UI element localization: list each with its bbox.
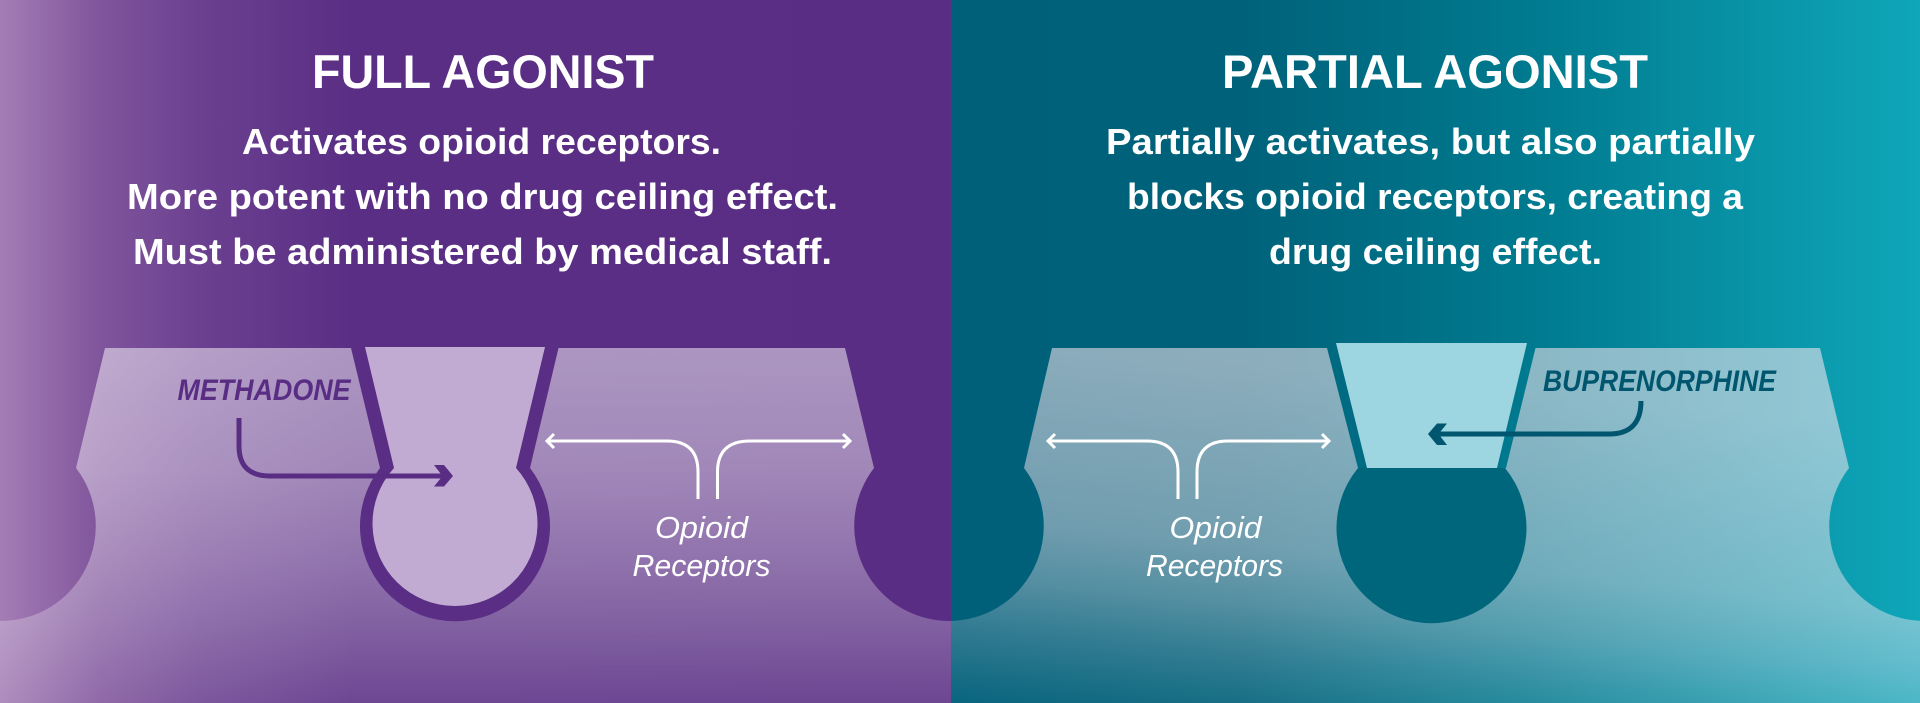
- description: partial agonist: [1106, 121, 1756, 272]
- description: full agonist: Must be administered by medical staff.: [133, 231, 832, 272]
- buprenorphine molecule partly seated in receptor: [1336, 343, 1527, 468]
- panel background: teal: [951, 0, 1920, 703]
- label: opioid receptors: Receptors: [1146, 548, 1283, 583]
- receptor cell surface: full agonist: [0, 348, 952, 703]
- arrow: methadone into receptor: [239, 418, 453, 486]
- label: opioid receptors: [632, 510, 770, 583]
- label: opioid receptors: Receptors: [632, 548, 770, 583]
- description: full agonist: Activates opioid receptors.: [242, 121, 721, 162]
- arrows: opioid receptors: [547, 434, 850, 499]
- label: opioid receptors: [1146, 510, 1283, 583]
- description: partial agonist: blocks opioid receptors, creating a: [1127, 176, 1744, 217]
- description: full agonist: [127, 121, 838, 272]
- description: partial agonist: Partially activates, but also partially: [1106, 121, 1756, 162]
- label: buprenorphine: BUPRENORPHINE: [1543, 365, 1777, 398]
- receptor cell surface: partial agonist: [948, 348, 1920, 703]
- label: opioid receptors: Opioid: [1170, 510, 1263, 545]
- label: methadone: METHADONE: [178, 374, 351, 407]
- arrows: opioid receptors: [1048, 434, 1329, 499]
- panel: full agonist: [0, 0, 952, 703]
- panel background: purple: [0, 0, 952, 703]
- heading: full agonist: FULL AGONIST: [312, 45, 654, 98]
- description: full agonist: More potent with no drug ceiling effect.: [127, 176, 838, 217]
- heading: partial agonist: PARTIAL AGONIST: [1222, 45, 1648, 98]
- label: opioid receptors: Opioid: [655, 510, 750, 545]
- panel: partial agonist: [948, 0, 1920, 703]
- arrow: buprenorphine into receptor: [1428, 401, 1641, 445]
- methadone molecule fully seated in receptor: [365, 347, 545, 606]
- receptor pocket: blocked circle: [1337, 468, 1527, 623]
- description: partial agonist: drug ceiling effect.: [1269, 231, 1602, 272]
